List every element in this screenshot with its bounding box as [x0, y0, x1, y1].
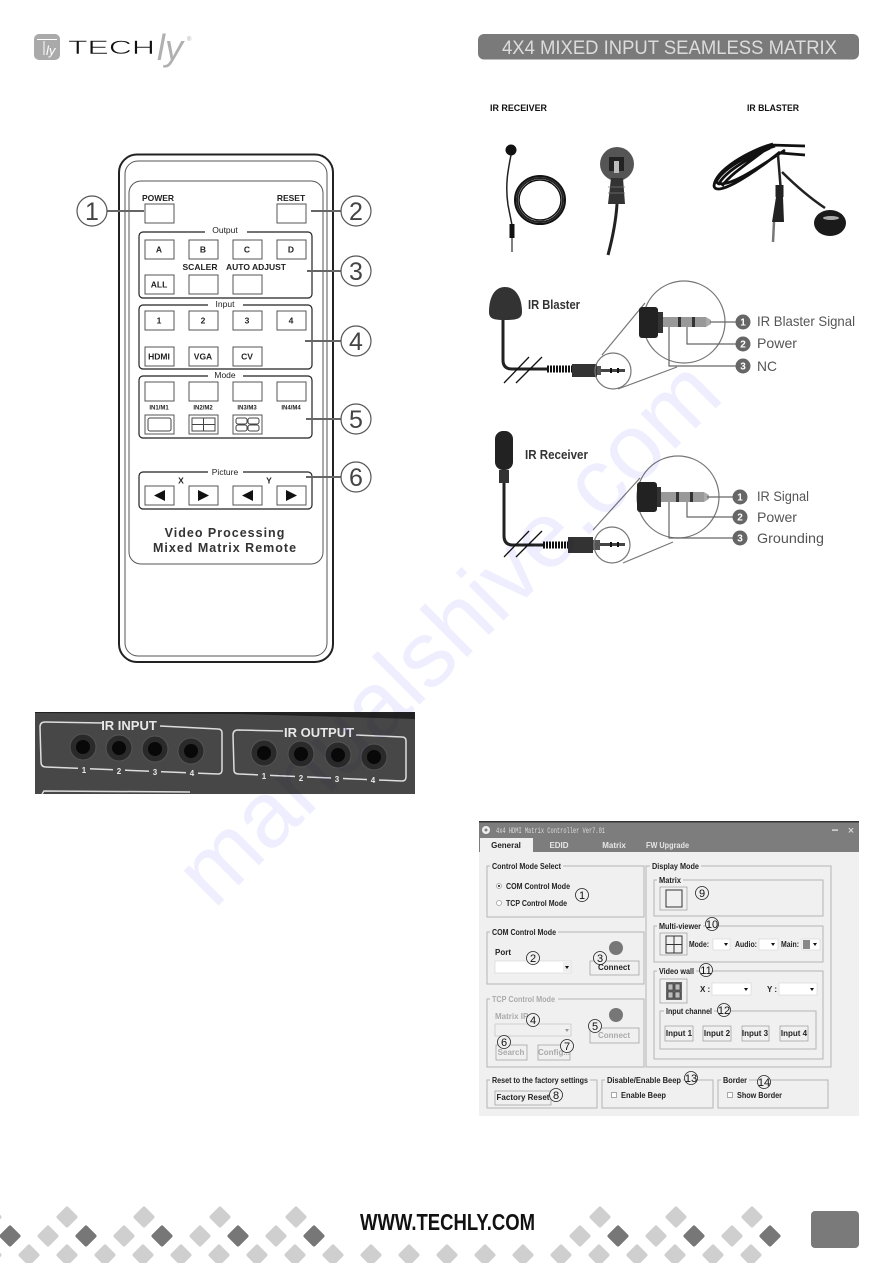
mode group: IN4/M4: [281, 406, 301, 412]
window title bar: General: [491, 841, 521, 850]
title bar: 4X4 MIXED INPUT SEAMLESS MATRIX: [502, 37, 837, 59]
output group: SCALER: [183, 262, 217, 272]
group: TCP control mode: 5: [592, 1021, 598, 1033]
group: disable or enable beep: 13: [685, 1073, 697, 1085]
group: COM control mode: 3: [597, 953, 603, 965]
input group: 4: [289, 316, 294, 326]
remote control diagram: [77, 154, 371, 662]
header logo: Techly: [34, 27, 192, 68]
multi-viewer sub-group: Main:: [781, 940, 799, 949]
photo: IR receiver head close-up: [600, 147, 634, 255]
input group: [139, 299, 312, 369]
multi-viewer sub-group: Audio:: [735, 940, 757, 949]
input group: 1: [157, 316, 162, 326]
group: control mode select: [487, 862, 644, 917]
IR output bracket: [233, 725, 406, 781]
input group: 3: [245, 316, 250, 326]
callout 4: [305, 326, 371, 356]
callout 2: [311, 196, 371, 226]
output group: C: [244, 244, 250, 254]
group: COM control mode: [487, 928, 644, 984]
watermark: manualshive.com: [155, 339, 740, 924]
remote body: [119, 154, 333, 662]
input group: HDMI: [148, 352, 170, 362]
group: COM control mode: COM Control Mode: [492, 928, 556, 937]
jack numbers: 4: [190, 769, 195, 778]
IR output bracket: IR OUTPUT: [284, 725, 354, 740]
blaster pin labels: [669, 313, 855, 374]
group: control mode select: TCP Control Mode: [506, 899, 567, 908]
photo: IR receiver with coiled cable: [506, 144, 565, 252]
blaster pin labels: IR Blaster Signal: [757, 313, 855, 329]
input channel sub-group: Input 3: [742, 1029, 769, 1038]
power and reset buttons: [142, 193, 306, 223]
window title bar: Matrix: [602, 841, 626, 850]
IR input bracket: [40, 718, 222, 774]
input channel sub-group: Input 1: [666, 1029, 693, 1038]
header logo: Techly: ®: [187, 36, 192, 43]
mode group: Mode: [214, 370, 236, 380]
group: display mode: Display Mode: [652, 862, 699, 871]
multi-viewer sub-group: Mode:: [689, 940, 709, 949]
group: TCP control mode: Config...: [538, 1048, 570, 1057]
output group: AUTO ADJUST: [226, 262, 287, 272]
diagram: IR blaster plug pinout: [489, 281, 855, 389]
group: disable or enable beep: [602, 1072, 713, 1108]
callout 5: 5: [349, 406, 363, 434]
receiver pin labels: 1: [737, 492, 743, 504]
remote caption: Mixed Matrix Remote: [153, 541, 297, 555]
receiver head and cable: [495, 431, 625, 557]
mode group: IN1/M1: [149, 406, 169, 412]
matrix sub-group: 9: [699, 888, 705, 900]
window title bar: [479, 821, 859, 852]
group: COM control mode: Port: [495, 948, 511, 957]
group: reset to factory settings: Factory Reset: [497, 1093, 550, 1102]
blaster magnifier: [595, 281, 725, 389]
receiver pin labels: 3: [737, 534, 743, 544]
photo: IR blaster with cable bundle: [714, 144, 846, 242]
callout 2: 2: [349, 198, 363, 226]
receiver pin labels: Power: [757, 509, 797, 525]
header logo: Techly: ly: [157, 27, 185, 68]
callout 5: [306, 404, 371, 434]
multi-viewer sub-group: 10: [706, 919, 718, 931]
group: reset to factory settings: [487, 1076, 597, 1108]
group: control mode select: 1: [579, 890, 585, 902]
picture group: [139, 467, 312, 509]
group: border: Show Border: [737, 1091, 782, 1100]
jack numbers: 2: [117, 767, 122, 776]
blaster pin labels: NC: [757, 358, 777, 374]
input group: 2: [201, 316, 206, 326]
jack numbers: 3: [153, 768, 158, 777]
jack numbers: 2: [299, 774, 304, 783]
input channel sub-group: Input channel: [666, 1007, 712, 1016]
blaster pin labels: 3: [740, 362, 746, 372]
picture group: X: [178, 476, 184, 486]
multi-viewer sub-group: [654, 918, 823, 962]
heading: IR receiver: IR RECEIVER: [490, 103, 547, 114]
blaster plug close-up: [639, 307, 711, 338]
receiver pin labels: IR Signal: [757, 488, 809, 504]
blaster pin labels: 2: [740, 340, 746, 350]
input channel sub-group: Input 2: [704, 1029, 731, 1038]
header logo: Techly: TECH: [68, 38, 155, 59]
panel: matrix controller software window: [479, 821, 859, 1116]
footer website address: WWW.TECHLY.COM: [360, 1209, 535, 1235]
receiver pin labels: [669, 488, 824, 546]
group: TCP control mode: 7: [564, 1041, 570, 1053]
remote caption: Video Processing: [165, 526, 285, 540]
input channel sub-group: [660, 1004, 816, 1049]
input group: VGA: [194, 352, 212, 362]
receiver magnifier: [593, 456, 719, 563]
group: border: 14: [758, 1077, 770, 1089]
blaster pin labels: 1: [740, 318, 746, 328]
video wall sub-group: X :: [700, 985, 710, 994]
blaster head and cable: [489, 287, 625, 383]
group: reset to factory settings: 8: [553, 1090, 559, 1102]
IR input bracket: IR INPUT: [101, 718, 157, 733]
group: COM control mode: Connect: [598, 963, 630, 972]
jack numbers: [78, 766, 379, 785]
window title bar: 4x4 HDMI Matrix Controller Ver7.01: [496, 827, 605, 836]
mode group: IN2/M2: [193, 406, 213, 412]
group: control mode select: COM Control Mode: [506, 882, 570, 891]
window title bar: EDID: [549, 841, 569, 850]
callout 6: [306, 462, 371, 492]
callout 3: 3: [349, 258, 363, 286]
blaster pin labels: Power: [757, 335, 797, 351]
picture group: Y: [266, 476, 272, 486]
input group: CV: [241, 352, 253, 362]
group: border: [718, 1076, 828, 1108]
group: TCP control mode: Matrix IP: [495, 1012, 529, 1021]
panel photo: IR input and output jacks: [35, 712, 415, 794]
output group: B: [200, 244, 206, 254]
video wall sub-group: Y :: [767, 985, 777, 994]
header logo: Techly: ly: [46, 43, 57, 58]
footer diamond pattern: [0, 1208, 778, 1263]
jack numbers: 1: [82, 766, 87, 775]
window title bar: FW Upgrade: [646, 841, 690, 850]
mode group: IN3/M3: [237, 406, 257, 412]
output group: D: [288, 244, 294, 254]
group: disable or enable beep: Enable Beep: [621, 1091, 666, 1100]
callout 1: 1: [85, 198, 99, 226]
input group: Input: [216, 299, 235, 309]
jack numbers: 4: [371, 776, 376, 785]
callout 3: [307, 256, 371, 286]
input channel sub-group: Input 4: [781, 1029, 808, 1038]
power and reset buttons: POWER: [142, 193, 174, 203]
receiver pin labels: Grounding: [757, 530, 824, 546]
callout 6: 6: [349, 464, 363, 492]
group: TCP control mode: Connect: [598, 1031, 630, 1040]
group: TCP control mode: TCP Control Mode: [492, 995, 555, 1004]
window title bar: ×: [848, 825, 854, 837]
group: display mode: [646, 862, 831, 1067]
power and reset buttons: RESET: [277, 193, 306, 203]
matrix sub-group: [654, 876, 823, 916]
input channel sub-group: 12: [718, 1005, 730, 1017]
multi-viewer sub-group: Multi-viewer: [659, 922, 701, 931]
video wall sub-group: 11: [700, 965, 712, 977]
jack numbers: 1: [262, 772, 267, 781]
diagram: IR receiver plug pinout: [495, 431, 824, 563]
group: TCP control mode: Search: [498, 1048, 524, 1057]
matrix sub-group: Matrix: [659, 876, 682, 885]
picture group: Picture: [212, 467, 238, 477]
label: IR Receiver: IR Receiver: [525, 448, 588, 462]
label: IR Blaster: IR Blaster: [528, 298, 580, 312]
group: control mode select: Control Mode Select: [492, 862, 561, 871]
page number box: [811, 1211, 859, 1248]
output group: Output: [212, 225, 238, 235]
group: reset to factory settings: Reset to the factory settings: [492, 1076, 588, 1085]
output group: A: [156, 244, 162, 254]
heading: IR blaster: IR BLASTER: [747, 103, 799, 114]
receiver plug close-up: [637, 482, 709, 512]
group: TCP control mode: 6: [501, 1037, 507, 1049]
remote caption: [153, 526, 297, 555]
group: disable or enable beep: Disable/Enable Beep: [607, 1076, 681, 1085]
video wall sub-group: [654, 964, 823, 1059]
output group: [139, 225, 312, 298]
receiver pin labels: 2: [737, 512, 743, 524]
callout 4: 4: [349, 328, 363, 356]
group: TCP control mode: 4: [530, 1015, 536, 1027]
jack sockets: [70, 734, 387, 770]
video wall sub-group: Video wall: [659, 967, 694, 976]
group: COM control mode: 2: [530, 953, 536, 965]
output group: ALL: [151, 280, 167, 290]
group: TCP control mode: [487, 995, 644, 1067]
jack numbers: 3: [335, 775, 340, 784]
mode group: [139, 370, 312, 438]
callout 1: [77, 196, 144, 226]
group: border: Border: [723, 1076, 747, 1085]
